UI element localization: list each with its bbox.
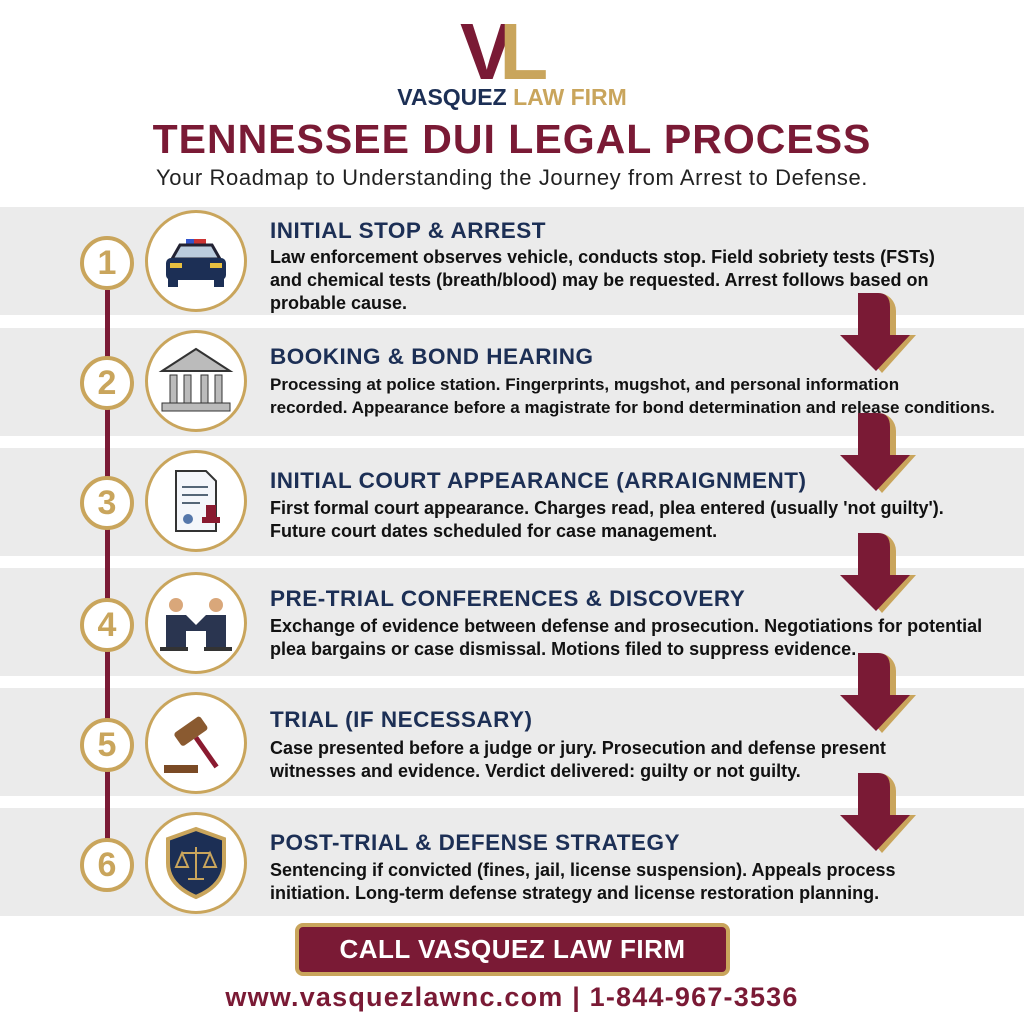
step 1 [80,210,935,313]
heading: INITIAL STOP & ARREST [270,218,546,243]
call button: CALL VASQUEZ LAW FIRM [339,934,686,964]
text [270,616,982,659]
step 4: 4 [98,606,116,644]
step 3 [80,450,944,552]
icon: document [145,450,247,552]
text: Law enforcement observes vehicle, conducts stop. Field sobriety tests (FSTs) [270,247,935,267]
logo mark: VL [460,7,534,96]
text: Exchange of evidence between defense and prosecution. Negotiations for potential [270,616,982,636]
text: Case presented before a judge or jury. Prosecution and defense present [270,738,886,758]
title: TENNESSEE DUI LEGAL PROCESS [153,116,871,162]
text: plea bargains or case dismissal. Motions filed to suppress evidence. [270,639,856,659]
text [270,738,886,781]
text: and chemical tests (breath/blood) may be requested. Arrest follows based on [270,270,928,290]
text: witnesses and evidence. Verdict delivered: guilty or not guilty. [270,761,801,781]
step 1: 1 [98,244,116,282]
heading: POST-TRIAL & DEFENSE STRATEGY [270,830,680,855]
step 3: 3 [98,484,116,522]
text: initiation. Long-term defense strategy and license restoration planning. [270,883,879,903]
icon: gavel [145,692,247,794]
firm name: VASQUEZ LAW FIRM [397,84,627,110]
icon: courthouse [145,330,247,432]
text: recorded. Appearance before a magistrate for bond determination and release conditions. [270,398,995,417]
step 5 [80,692,886,794]
timeline line [105,290,110,840]
subtitle: Your Roadmap to Understanding the Journey from Arrest to Defense. [156,165,868,190]
text [270,375,995,417]
logo [397,7,627,110]
step 2: 2 [98,364,116,402]
icon: police car [145,210,247,312]
step 5: 5 [98,726,116,764]
text [270,247,935,313]
contact line: www.vasquezlawnc.com | 1-844-967-3536 [225,982,799,1012]
text [270,860,896,903]
text: probable cause. [270,293,407,313]
text [270,498,944,541]
step 6 [80,812,896,914]
heading: TRIAL (IF NECESSARY) [270,707,533,732]
heading: INITIAL COURT APPEARANCE (ARRAIGNMENT) [270,468,806,493]
step 2 [80,330,995,432]
icon: shield scales [145,812,247,914]
heading: BOOKING & BOND HEARING [270,344,594,369]
call button [295,923,730,976]
text: Future court dates scheduled for case management. [270,521,717,541]
text: Processing at police station. Fingerprints, mugshot, and personal information [270,375,899,394]
step 6: 6 [98,846,116,884]
text: First formal court appearance. Charges read, plea entered (usually 'not guilty'). [270,498,944,518]
step 4 [80,572,982,674]
arrows [840,293,916,373]
heading: PRE-TRIAL CONFERENCES & DISCOVERY [270,586,745,611]
text: Sentencing if convicted (fines, jail, license suspension). Appeals process [270,860,896,880]
icon: handshake [145,572,247,674]
bands [0,207,1024,315]
